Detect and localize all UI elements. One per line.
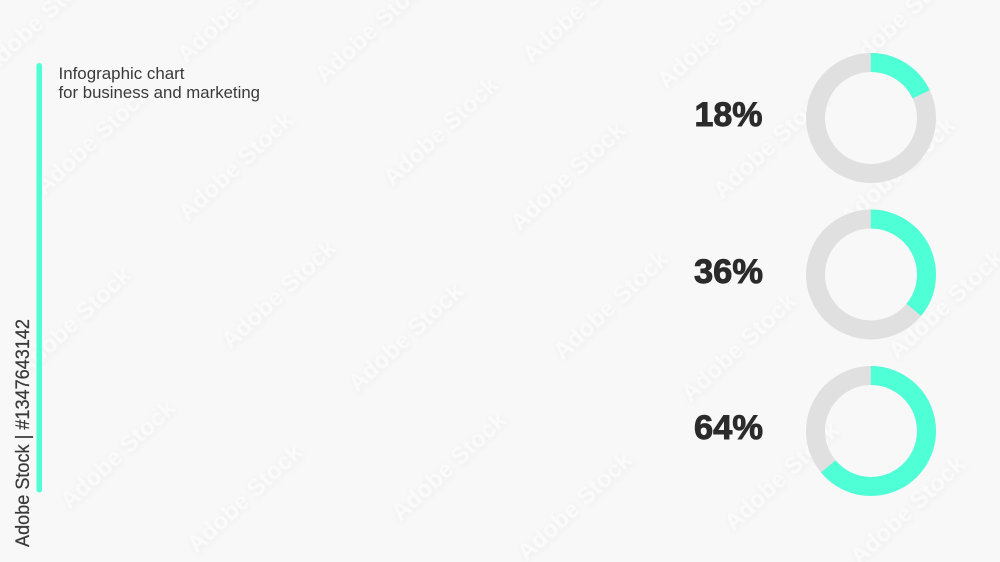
heading text: Infographic chart — [58, 65, 185, 83]
donut chart: 18% — [816, 62, 926, 174]
heading text — [58, 65, 260, 102]
watermark pattern: Adobe Stock — [55, 394, 181, 514]
donut chart: 64% — [816, 376, 926, 486]
row: 18 percent — [694, 62, 926, 174]
watermark pattern: Adobe Stock — [386, 406, 512, 526]
watermark pattern: Adobe Stock — [505, 116, 631, 236]
watermark pattern: Adobe Stock — [182, 438, 308, 558]
watermark pattern: Adobe Stock — [378, 71, 504, 191]
row: 64 percent — [694, 376, 926, 486]
watermark pattern: Adobe Stock — [11, 261, 137, 381]
watermark pattern: Adobe Stock — [719, 416, 845, 536]
watermark pattern: Adobe Stock — [835, 111, 961, 231]
watermark pattern: Adobe Stock — [173, 106, 299, 226]
watermark pattern: Adobe Stock — [216, 234, 342, 354]
row: 36 percent — [694, 219, 926, 330]
watermark pattern: Adobe Stock — [676, 287, 802, 407]
value: 18%: 18% — [694, 96, 762, 134]
heading text: for business and marketing — [58, 84, 260, 102]
value: 64%: 64% — [694, 409, 763, 447]
watermark pattern: Adobe Stock — [548, 245, 674, 365]
value: 36%: 36% — [694, 253, 763, 291]
vertical accent bar — [36, 63, 42, 492]
watermark pattern: Adobe Stock — [343, 277, 469, 397]
watermark pattern: Adobe Stock — [30, 80, 156, 200]
watermark pattern: Adobe Stock — [708, 84, 834, 204]
stock credit text: Adobe Stock | #1347643142 — [13, 319, 34, 547]
donut chart: 36% — [816, 219, 926, 330]
